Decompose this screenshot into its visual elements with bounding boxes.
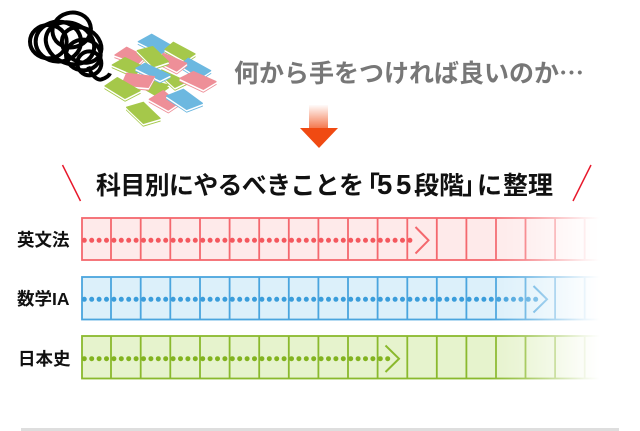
book: green centre low — [162, 70, 187, 90]
book: pink lower right — [180, 72, 216, 92]
book: blue back — [138, 34, 173, 56]
book: green centre top — [137, 47, 168, 69]
bar: 英文法 progress — [82, 218, 612, 260]
bar: 日本史 progress — [82, 336, 612, 378]
arrow: down — [300, 105, 338, 148]
slash: left — [62, 165, 80, 201]
title: 段階 — [414, 166, 464, 202]
row: 英文法 — [17, 218, 612, 260]
bottom rule — [21, 428, 619, 431]
title: 」 — [462, 166, 487, 202]
title: 科目別にやるべきことを — [96, 166, 363, 202]
icon: tangled scribble — [30, 8, 110, 80]
book: green left — [105, 78, 140, 101]
book: pink back — [115, 47, 145, 66]
slash: right — [573, 165, 591, 201]
bar: 数学IA progress — [82, 277, 612, 320]
book: blue right — [180, 58, 211, 80]
icon: scattered books — [105, 34, 216, 126]
title: 55 — [377, 169, 411, 200]
label: 数学IA: 数学IA — [17, 289, 70, 309]
book: pink centre — [122, 73, 154, 90]
book: green left back — [112, 58, 143, 78]
row: 日本史 — [18, 336, 612, 378]
title: 「 — [355, 166, 380, 202]
book: green lower — [145, 80, 168, 96]
title: 整理 — [503, 166, 553, 202]
book: blue centre — [136, 63, 170, 83]
book: blue bottom — [167, 89, 202, 112]
row: 数学IA — [17, 277, 612, 320]
label: 英文法: 英文法 — [17, 230, 70, 250]
label: 日本史: 日本史 — [18, 349, 71, 369]
book: pink bottom — [149, 91, 178, 113]
heading: worry question: 何から手をつければ良いのか… — [234, 54, 584, 90]
title: に — [477, 166, 502, 202]
book: green bottom — [127, 102, 160, 126]
book: green back — [165, 42, 195, 63]
book: pink right — [158, 53, 187, 74]
